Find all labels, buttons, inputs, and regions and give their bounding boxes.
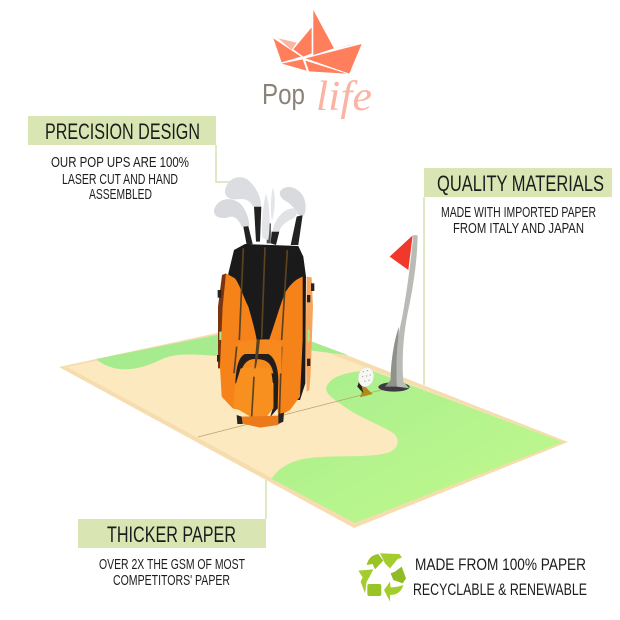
fold line	[198, 389, 385, 437]
left orange panel	[220, 273, 257, 410]
seams	[234, 247, 287, 415]
logo wordmark Pop: Pop	[262, 79, 305, 111]
clubs	[214, 177, 306, 245]
logo boat	[273, 10, 362, 74]
golf bag	[214, 177, 314, 428]
base	[242, 416, 278, 428]
side strap	[306, 277, 313, 392]
lower green	[272, 371, 563, 523]
callout: precision design: OUR POP UPS ARE 100%	[51, 154, 189, 171]
upper front pocket	[237, 339, 282, 373]
leader lines	[216, 145, 424, 519]
flag	[378, 235, 418, 392]
callout: thicker paper: COMPETITORS' PAPER	[113, 572, 230, 589]
logo	[262, 10, 372, 120]
right orange panel	[269, 277, 303, 417]
callout: thicker paper	[78, 519, 266, 589]
black strap	[235, 354, 278, 417]
callout: thicker paper: OVER 2X THE GSM OF MOST	[99, 556, 245, 573]
logo wordmark life: life	[316, 74, 372, 120]
callout: precision design: PRECISION DESIGN	[45, 119, 200, 144]
pop-up card base	[59, 323, 568, 528]
golf ball on tee	[356, 366, 376, 397]
black shell	[228, 244, 306, 400]
left edge strip	[218, 273, 226, 368]
callout: precision design: ASSEMBLED	[89, 186, 152, 203]
callout: precision design	[28, 116, 216, 203]
icon: recycling arrows	[358, 553, 406, 602]
lower flap	[233, 367, 273, 417]
callout: quality materials	[424, 168, 612, 237]
callout: precision design: LASER CUT AND HAND	[62, 171, 178, 188]
bag body	[217, 244, 314, 428]
recycling statement	[413, 555, 587, 599]
callout: thicker paper: THICKER PAPER	[107, 522, 236, 547]
upper green	[96, 329, 250, 369]
